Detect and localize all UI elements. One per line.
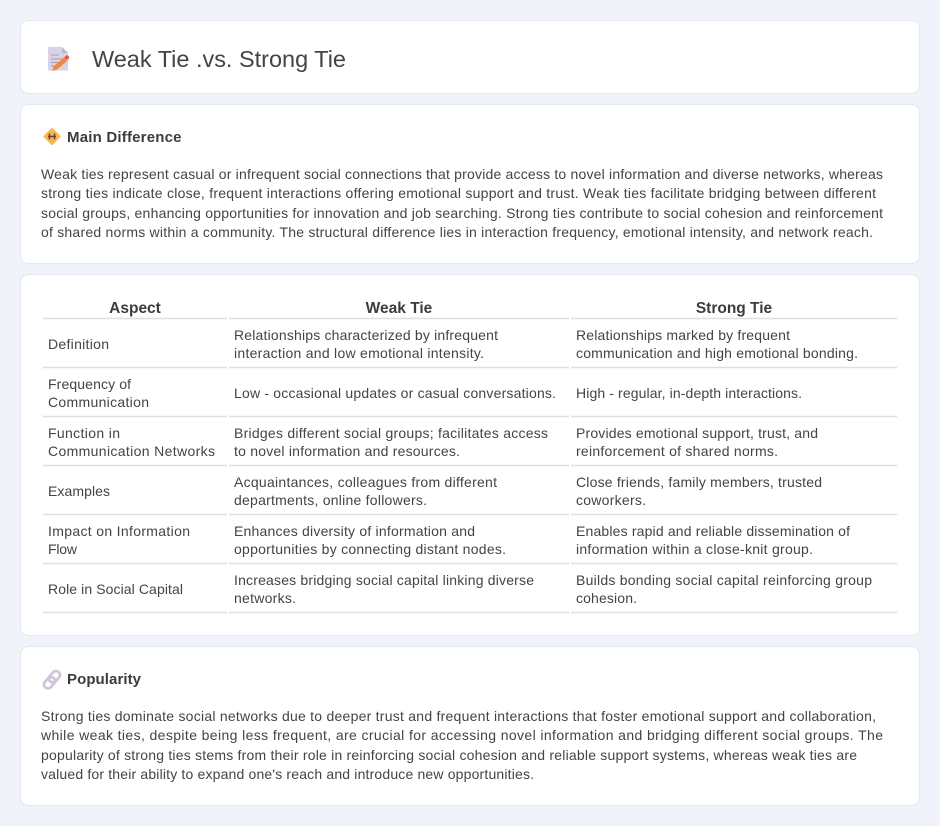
text block: popularity: Strong ties dominate social networks due to deeper trust and frequent interactions that foster emotional support and collaboration, bbox=[41, 708, 876, 724]
panel: comparison table bbox=[20, 274, 920, 636]
table rules bbox=[43, 318, 897, 612]
row: examples: Close friends, family members, trusted bbox=[576, 474, 822, 490]
row: definition: Relationships characterized by infrequent bbox=[234, 327, 498, 343]
heading: popularity: Popularity bbox=[67, 671, 142, 688]
row: frequency of communication bbox=[48, 376, 802, 410]
row: definition: communication and high emotional bonding. bbox=[576, 345, 858, 361]
text block: popularity: while weak ties, despite being less frequent, are crucial for accessing novel information and bridging different social groups. The bbox=[40, 727, 883, 743]
row: function in communication networks: to novel information and resources. bbox=[234, 443, 460, 459]
title: Weak Tie .vs. Strong Tie bbox=[92, 46, 346, 72]
table header: Weak Tie bbox=[366, 300, 433, 317]
heading: main difference: Main Difference bbox=[67, 129, 182, 146]
row: role in social capital: Builds bonding social capital reinforcing group bbox=[576, 572, 872, 588]
row: examples: Acquaintances, colleagues from different bbox=[234, 474, 497, 490]
text block: popularity: valued for their ability to expand one's reach and introduce new opportunities. bbox=[41, 766, 534, 782]
row: definition bbox=[48, 327, 858, 361]
table header bbox=[109, 300, 773, 317]
row: impact on information flow bbox=[48, 523, 850, 557]
panel: main difference bbox=[20, 104, 920, 264]
text block: popularity: popularity of strong ties stems from their role in reinforcing social cohesion and reliable support systems, whereas weak ties are bbox=[41, 747, 857, 763]
row: frequency of communication: Communication bbox=[48, 394, 149, 410]
row: definition: Relationships marked by frequent bbox=[576, 327, 790, 343]
row: role in social capital: Role in Social Capital bbox=[48, 581, 183, 597]
panel: popularity bbox=[20, 646, 920, 806]
row: function in communication networks: Communication Networks bbox=[48, 443, 215, 459]
row: impact on information flow: information within a close-knit group. bbox=[576, 541, 813, 557]
row: frequency of communication: Low - occasional updates or casual conversations. bbox=[234, 385, 556, 401]
row: impact on information flow: Enhances diversity of information and bbox=[234, 523, 475, 539]
text block: main difference: Weak ties represent casual or infrequent social connections that provide access to novel information and diverse networks, whereas bbox=[41, 166, 883, 182]
row: impact on information flow: Enables rapid and reliable dissemination of bbox=[576, 523, 850, 539]
row: examples: Examples bbox=[48, 483, 110, 499]
row: role in social capital: cohesion. bbox=[576, 590, 637, 606]
text block: main difference: strong ties indicate close, frequent interactions offering emotional support and trust. Weak ties facilitate bridging between different bbox=[41, 185, 876, 201]
row: impact on information flow: opportunities by connecting distant nodes. bbox=[234, 541, 506, 557]
text block: main difference: of shared norms within a community. The structural difference lies in interaction frequency, emotional intensity, and network reach. bbox=[41, 224, 873, 240]
panel: header bbox=[20, 20, 920, 94]
row: function in communication networks: Function in bbox=[48, 425, 120, 441]
row: definition: interaction and low emotional intensity. bbox=[234, 345, 484, 361]
table header: Aspect bbox=[109, 300, 161, 317]
row: examples bbox=[48, 474, 822, 508]
row: examples: departments, online followers. bbox=[234, 492, 427, 508]
table header: Strong Tie bbox=[696, 300, 773, 317]
row: frequency of communication: Frequency of bbox=[48, 376, 131, 392]
text block: popularity bbox=[40, 708, 883, 782]
row: examples: coworkers. bbox=[576, 492, 646, 508]
row: frequency of communication: High - regular, in-depth interactions. bbox=[576, 385, 802, 401]
row: impact on information flow: Flow bbox=[48, 541, 78, 557]
row: definition: Definition bbox=[48, 336, 109, 352]
text block: main difference: social groups, enhancing opportunities for innovation and job searching. Strong ties contribute to social cohesion and reinforcement bbox=[41, 205, 883, 221]
text block: main difference bbox=[41, 166, 883, 240]
icon: diamond road sign bbox=[44, 129, 60, 144]
row: role in social capital: Increases bridging social capital linking diverse bbox=[234, 572, 534, 588]
icon: document with pencil bbox=[48, 47, 69, 71]
row: role in social capital: networks. bbox=[234, 590, 296, 606]
row: role in social capital bbox=[48, 572, 872, 606]
icon: chain link bbox=[42, 669, 62, 690]
row: impact on information flow: Impact on Information bbox=[48, 523, 190, 539]
row: function in communication networks: Provides emotional support, trust, and bbox=[576, 425, 818, 441]
row: function in communication networks: Bridges different social groups; facilitates access bbox=[234, 425, 548, 441]
row: function in communication networks: reinforcement of shared norms. bbox=[576, 443, 778, 459]
row: function in communication networks bbox=[48, 425, 818, 459]
